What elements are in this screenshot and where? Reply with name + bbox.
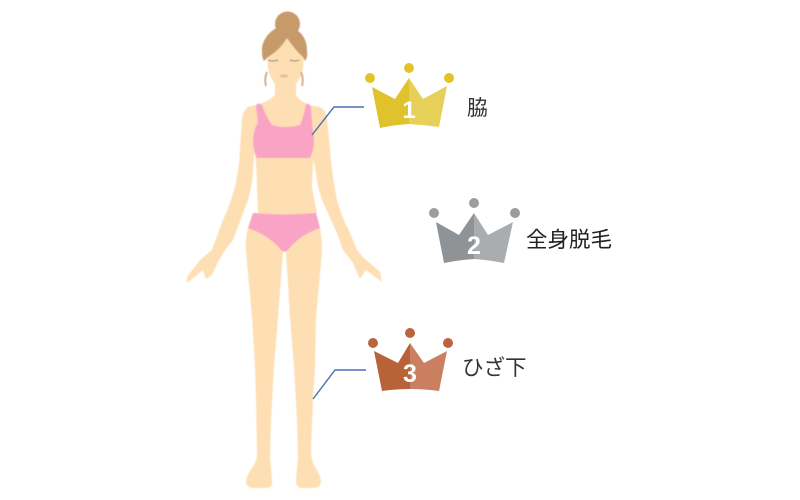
crown rank 1: 1 (402, 97, 416, 124)
label: full body: 全身脱毛 (526, 228, 612, 252)
label: below knee: ひざ下 (462, 355, 527, 380)
leader line: armpit (312, 107, 364, 135)
torso and neck (247, 82, 317, 213)
hair strands (265, 72, 303, 86)
crown rank 3 (368, 328, 453, 391)
label: armpit: 脇 (467, 97, 488, 120)
pink briefs (248, 213, 320, 252)
crown rank 3: 3 (403, 360, 417, 388)
left arm (187, 106, 258, 283)
face (268, 36, 304, 88)
hair bun (275, 12, 300, 36)
right arm (310, 106, 382, 282)
leader line: below knee (313, 370, 366, 399)
mouth (280, 74, 288, 78)
pink top (253, 104, 314, 158)
crown rank 2: 2 (467, 232, 481, 260)
crown rank 2 (429, 198, 520, 263)
eyes (268, 60, 299, 61)
left leg (246, 213, 322, 488)
illustration: woman figure (187, 12, 382, 488)
hair (262, 25, 307, 61)
crown rank 1 (365, 63, 454, 128)
